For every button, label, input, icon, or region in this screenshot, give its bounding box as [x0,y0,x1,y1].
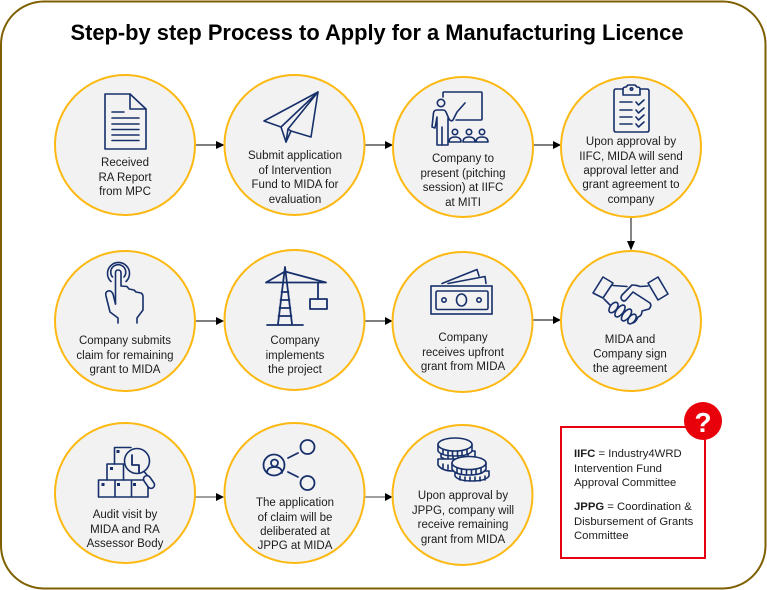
arrow: step 2 to 3 [364,141,393,149]
text: step 3: present (pitching [420,168,506,180]
text: step 1: from MPC [99,186,151,198]
text: step 6: Company [438,332,488,344]
text: step 9: MIDA and RA [90,524,160,536]
text: step 1: RA Report [98,172,152,184]
icon: boxes and magnifier [98,448,156,497]
text: IIFC definition: IIFC [574,448,595,460]
text: step 2: Fund to MIDA for [252,179,339,191]
step 5: sign the agreement [561,251,701,391]
step 9: audit visit [55,423,195,563]
arrow: step 6 to 7 [364,317,392,325]
icon: presenter [432,92,488,145]
text: step 2: of Intervention [259,165,331,177]
text: step 3: session) at IIFC [423,182,503,194]
text: step 8: grant to MIDA [90,364,161,376]
arrow: step 3 to 4 [532,141,561,149]
icon: banknotes [431,270,492,314]
text: IIFC definition: Approval Committee [574,477,676,489]
panel: abbreviations legend [561,427,705,558]
text: step 10: JPPG at MIDA [258,540,333,552]
text: step 11: receive remaining [418,519,508,531]
text: step 5: the agreement [593,363,668,375]
text: JPPG definition: JPPG [574,501,604,513]
text: JPPG definition: Committee [574,530,629,542]
text: step 7: Company [270,335,320,347]
text: step 6: grant from MIDA [421,361,506,373]
step 7: implements the project [224,250,364,390]
text: step 3: Company to [432,153,494,165]
arrow: step 5 to 6 [531,316,561,324]
text: step 4: company [608,194,655,206]
step 4: approval letter [561,77,701,217]
text: step 8: Company submits [79,335,171,347]
text: step 10: of claim will be [258,512,332,524]
text: step 4: approval letter and [583,165,679,177]
text: step 4: Upon approval by [586,136,676,148]
text: step 11: grant from MIDA [421,534,506,546]
step 2: submit application [224,75,364,215]
text: step 4: grant agreement to [582,179,680,191]
arrow: step 1 to 2 [195,141,224,149]
step 3: pitching session [393,77,533,217]
arrow: step 7 to 8 [193,317,224,325]
title: Step-by step Process to Apply for a Manufacturing Licence [70,20,684,45]
text: step 5: MIDA and [605,334,655,346]
step 1: received RA report [55,75,195,215]
text: step 11: JPPG, company will [412,505,514,517]
icon: tower crane [266,267,327,325]
icon: coins [438,438,489,481]
text: step 2: Submit application [248,150,342,162]
text: step 1: Received [101,157,149,169]
step 11: receive remaining grant [392,425,532,565]
text: step 9: Audit visit by [93,509,158,521]
text: step 7: the project [268,364,323,376]
arrow: step 9 to 10 [193,493,224,501]
icon: share network [264,440,314,490]
text: JPPG definition: = Coordination & [604,501,692,513]
icon: handshake [593,277,668,325]
icon: clipboard checklist [614,85,649,132]
arrow: step 4 to 5 [627,216,635,250]
icon: question mark badge: ? [694,407,712,438]
arrow: step 10 to 11 [363,493,392,501]
text: step 9: Assessor Body [87,538,164,550]
icon: pointing hand [106,262,143,323]
text: step 10: deliberated at [260,526,331,538]
icon: question mark badge [684,402,722,440]
step 8: submits claim [55,251,195,391]
text: step 10: The application [256,497,334,509]
text: IIFC definition: = Industry4WRD [595,448,682,460]
text: IIFC definition: Intervention Fund [574,463,662,475]
step 6: receives upfront grant [392,252,532,392]
text: JPPG definition: Disbursement of Grants [574,516,694,528]
text: step 3: at MITI [445,197,481,209]
text: step 4: IIFC, MIDA will send [579,151,683,163]
step 10: deliberated at JPPG [224,423,364,563]
text: step 2: evaluation [269,194,321,206]
text: step 8: claim for remaining [76,350,174,362]
text: step 7: implements [266,350,325,362]
icon: paper plane [264,92,318,142]
text: step 11: Upon approval by [418,490,508,502]
text: step 6: receives upfront [422,347,505,359]
icon: document [105,94,146,149]
text: step 5: Company sign [593,348,667,360]
